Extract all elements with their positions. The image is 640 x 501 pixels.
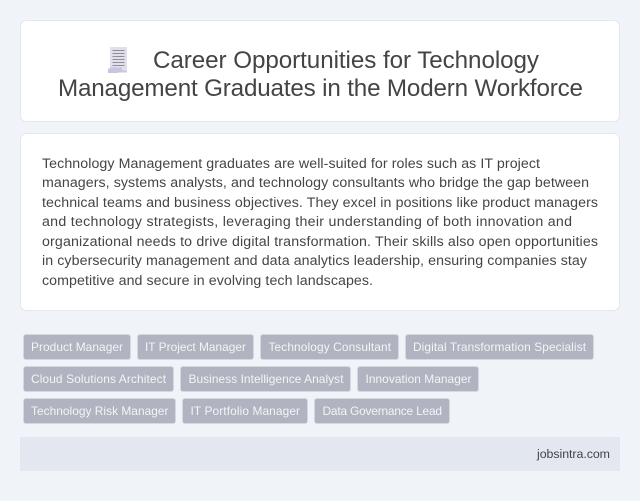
tag: Innovation Manager (358, 366, 478, 392)
title: Career Opportunities for Technology (153, 47, 540, 74)
description text: technical teams and business objectives. They excel in positions like product managers (42, 195, 598, 211)
tag: Innovation Manager: Innovation Manager (366, 372, 472, 386)
icon: paper receipt (108, 47, 127, 73)
footer bar (20, 437, 620, 471)
tag: Cloud Solutions Architect (24, 366, 174, 392)
tag: IT Portfolio Manager (182, 398, 308, 424)
tag: Data Governance Lead: Data Governance Lead (322, 404, 442, 418)
tags group (24, 334, 594, 424)
tag: Technology Consultant: Technology Consultant (268, 340, 392, 354)
tag: Cloud Solutions Architect: Cloud Solutions Architect (31, 372, 167, 386)
tag: Digital Transformation Specialist (406, 334, 594, 360)
tag: Business Intelligence Analyst (180, 366, 350, 392)
header panel (20, 20, 620, 122)
description text (42, 156, 598, 289)
tag: Product Manager (24, 334, 130, 360)
description text: managers, systems analysts, and technology consultants who bridge the gap between (42, 175, 589, 191)
tag: Digital Transformation Specialist: Digital Transformation Specialist (413, 340, 587, 354)
tag: Technology Consultant (260, 334, 398, 360)
description panel (20, 134, 620, 310)
description text: and technology strategists, leveraging their understanding of both innovation and (42, 214, 572, 230)
tag: IT Project Manager (138, 334, 254, 360)
description text: organizational needs to drive digital transformation. Their skills also open opportunities (42, 234, 598, 250)
title (58, 47, 583, 102)
tag: Technology Risk Manager (24, 398, 176, 424)
tag: Technology Risk Manager: Technology Risk Manager (31, 404, 169, 418)
description text: in cybersecurity management and data analytics leadership, ensuring companies stay (42, 253, 588, 269)
footer source text: jobsintra.com (536, 447, 610, 461)
tag: Business Intelligence Analyst: Business Intelligence Analyst (188, 372, 344, 386)
title: Management Graduates in the Modern Workforce (58, 75, 583, 102)
tag: Product Manager: Product Manager (31, 340, 123, 354)
description text: competitive and secure in evolving tech landscapes. (42, 273, 373, 289)
description text: Technology Management graduates are well-suited for roles such as IT project (42, 156, 540, 172)
tag: IT Portfolio Manager: IT Portfolio Manager (190, 404, 300, 418)
tag: Data Governance Lead (314, 398, 450, 424)
tag: IT Project Manager: IT Project Manager (145, 340, 246, 354)
